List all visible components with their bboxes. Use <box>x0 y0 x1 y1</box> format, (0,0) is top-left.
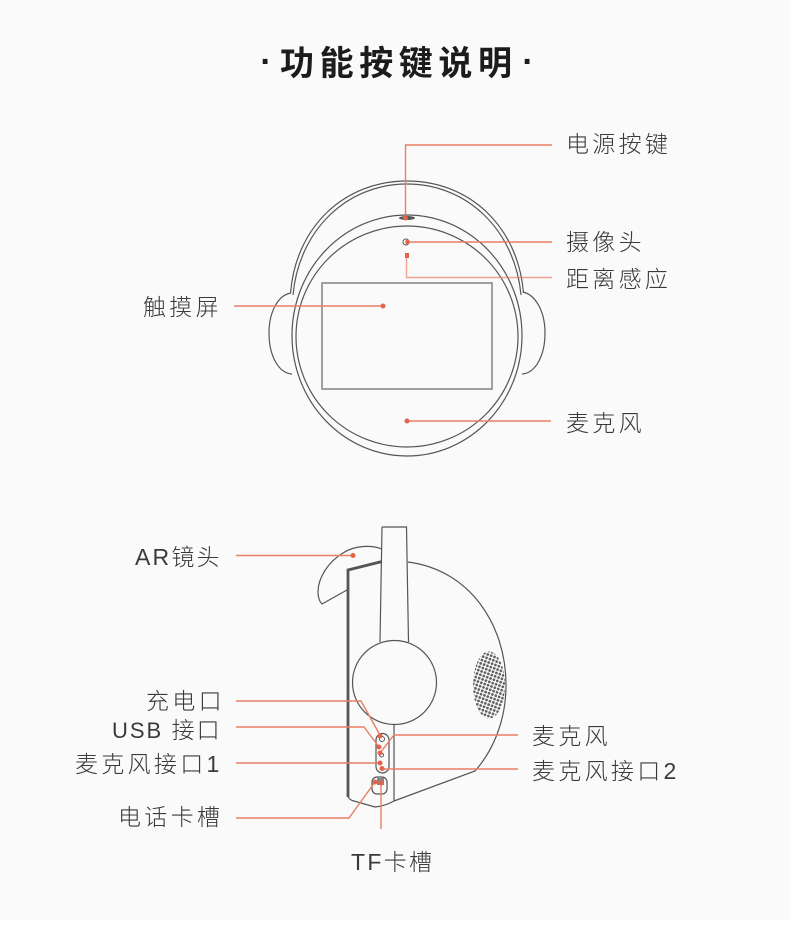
title: 功能按键说明 <box>280 45 518 83</box>
camera <box>403 239 409 245</box>
callout lines front <box>234 145 552 424</box>
labels front <box>143 131 671 436</box>
ear pad right <box>522 292 545 374</box>
side knob <box>352 640 436 724</box>
divider <box>393 724 395 801</box>
labels side: 充电口 <box>146 688 225 714</box>
inner ring <box>296 226 518 447</box>
proximity line <box>405 253 552 278</box>
labels front: 触摸屏 <box>143 294 222 320</box>
title: · <box>260 43 272 81</box>
labels front: 电源按键 <box>566 131 671 157</box>
callout lines side <box>236 553 518 829</box>
power button <box>399 216 415 220</box>
bottom <box>348 796 394 807</box>
labels side: 电话卡槽 <box>118 804 223 830</box>
AR line <box>236 553 356 558</box>
front view device <box>269 181 545 456</box>
sim slot <box>372 777 387 794</box>
mic port 1 line <box>236 760 382 766</box>
body left edge <box>348 562 382 797</box>
labels side: 麦克风 <box>532 723 611 749</box>
mic port 2 line <box>380 766 518 771</box>
touch screen line <box>234 304 386 308</box>
charging line <box>236 701 382 738</box>
USB line <box>236 727 382 750</box>
labels front: 距离感应 <box>566 266 671 292</box>
top band <box>380 527 408 642</box>
labels side: TF卡槽 <box>351 849 434 875</box>
camera line <box>405 240 552 244</box>
labels side: 麦克风接口1 <box>75 751 223 777</box>
screen <box>322 283 492 389</box>
port strip <box>376 734 389 773</box>
labels side: USB 接口 <box>112 717 222 743</box>
headband <box>290 181 524 295</box>
TF line <box>378 780 384 829</box>
title: · <box>522 43 534 81</box>
body <box>394 562 506 801</box>
side view device <box>318 527 506 807</box>
labels front: 摄像头 <box>566 229 645 255</box>
microphone line <box>404 418 551 424</box>
labels side: 麦克风接口2 <box>532 758 680 784</box>
labels side: AR镜头 <box>135 544 222 570</box>
labels front: 麦克风 <box>566 410 645 436</box>
labels side <box>75 544 680 875</box>
power line <box>403 145 552 220</box>
phone slot line <box>236 780 378 818</box>
ports <box>380 736 384 757</box>
outer shell <box>292 215 522 456</box>
speaker grille <box>473 652 505 718</box>
AR lens <box>318 546 382 604</box>
mic right line <box>378 735 518 756</box>
ear pad left <box>269 293 292 374</box>
